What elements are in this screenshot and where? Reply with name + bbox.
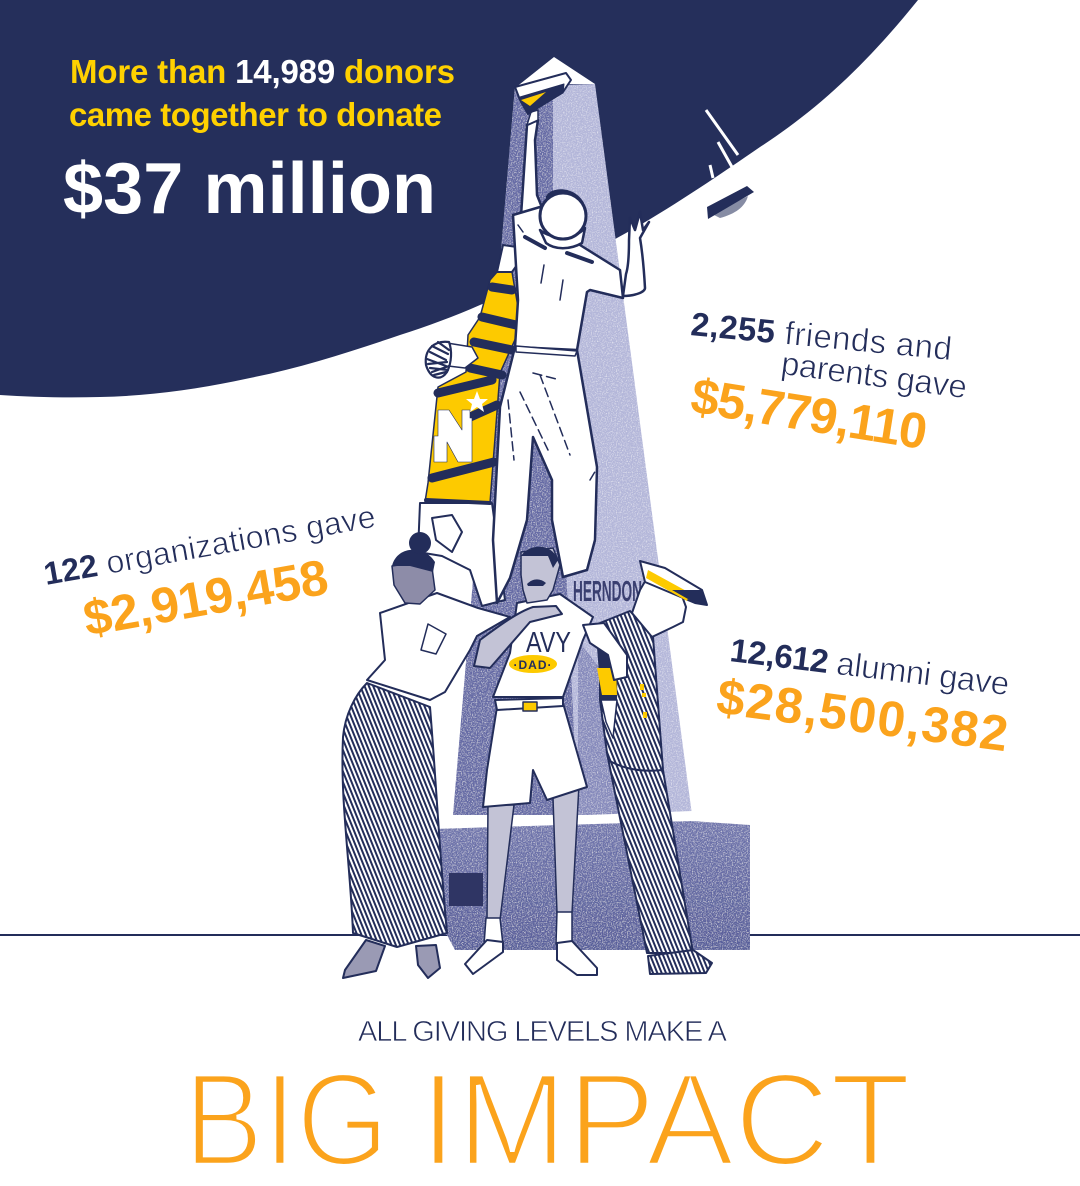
kid face xyxy=(447,343,478,368)
stat: organizations: $2,919,458 xyxy=(79,549,332,647)
shoulder boards xyxy=(525,237,592,262)
sweater stripes xyxy=(432,287,516,478)
dark navy arc background xyxy=(0,0,918,397)
oval lettering: ·DAD· xyxy=(514,658,552,672)
sweater xyxy=(425,272,518,503)
dad's arm over shoulder xyxy=(474,606,562,668)
obelisk monument xyxy=(433,57,750,950)
t-shirt xyxy=(493,594,593,697)
headline: donors xyxy=(69,53,455,133)
figure: dad in NAVY DAD t-shirt xyxy=(465,547,597,975)
sweater N xyxy=(434,410,472,462)
jacket hem xyxy=(608,760,663,771)
figure: midshipman in yellow striped sweater xyxy=(418,245,522,606)
gold buttons xyxy=(642,684,645,718)
stat: organizations xyxy=(41,498,378,647)
right arm xyxy=(623,212,649,296)
stat: alumni: $28,500,382 xyxy=(714,668,1011,762)
belt xyxy=(495,698,563,710)
headline: donors: came together to donate xyxy=(69,96,442,133)
head xyxy=(540,193,586,239)
engraved name: HERNDON xyxy=(573,575,642,607)
raised arm xyxy=(521,120,543,216)
head xyxy=(632,578,686,637)
moustache xyxy=(527,579,546,586)
skirt xyxy=(342,683,447,947)
cap band xyxy=(646,570,690,601)
kid hair xyxy=(426,342,451,378)
stat: friends and parents: $5,779,110 xyxy=(687,368,931,460)
headline: total amount: $37 million xyxy=(63,149,436,229)
headline: donors: More than 14,989 donors xyxy=(70,53,455,90)
figure: officer in uniform at right xyxy=(597,561,712,974)
shirt lettering: AVY xyxy=(526,627,571,659)
shirt folds xyxy=(518,225,563,300)
figure: woman with bun at left xyxy=(342,532,510,978)
belt xyxy=(516,346,577,356)
bun xyxy=(409,532,431,554)
figure: officer at top reaching for hat xyxy=(493,110,649,603)
sleeve with yellow stripes xyxy=(597,647,618,700)
cap back xyxy=(546,189,584,205)
officer's hand on dad's shoulder xyxy=(583,623,627,680)
lower hand xyxy=(601,700,617,738)
stat: friends and parents: parents gave xyxy=(779,344,969,405)
cap placed on obelisk top xyxy=(515,73,571,114)
shorts xyxy=(483,703,587,807)
belt buckle xyxy=(523,702,537,711)
sleeve yellow band xyxy=(597,668,617,695)
subheading: ALL GIVING LEVELS MAKE A xyxy=(358,1016,728,1048)
kid hand xyxy=(497,245,522,272)
flying hat with motion lines xyxy=(706,110,754,219)
shirt xyxy=(367,593,510,700)
woman's legs and shoes xyxy=(343,940,440,978)
sweater star xyxy=(466,391,488,412)
peaked cap xyxy=(640,561,707,605)
legs xyxy=(487,785,579,920)
hair xyxy=(521,547,558,568)
trouser pocket xyxy=(432,515,462,552)
face xyxy=(392,560,435,604)
shoes xyxy=(648,950,712,974)
uniform xyxy=(600,611,693,953)
stat: organizations: 122 organizations gave xyxy=(41,498,378,592)
ground line xyxy=(0,934,1080,936)
stat: friends and parents: 2,255 friends and xyxy=(689,305,954,367)
hand holding hat xyxy=(527,110,538,125)
kid white trousers xyxy=(418,503,505,606)
stat: alumni: 12,612 alumni gave xyxy=(728,631,1012,702)
shoes xyxy=(465,940,597,975)
head xyxy=(521,548,560,603)
collar xyxy=(540,228,585,248)
trouser creases xyxy=(508,373,596,480)
stat: friends and parents xyxy=(687,305,969,460)
hair xyxy=(392,550,435,572)
pocket xyxy=(421,624,446,654)
shirt xyxy=(513,207,623,350)
plaque xyxy=(449,873,483,906)
cap visor xyxy=(672,590,707,605)
main slogan xyxy=(184,1046,911,1186)
socks xyxy=(484,912,572,945)
yellow DAD oval xyxy=(509,655,557,673)
trousers xyxy=(493,347,597,603)
